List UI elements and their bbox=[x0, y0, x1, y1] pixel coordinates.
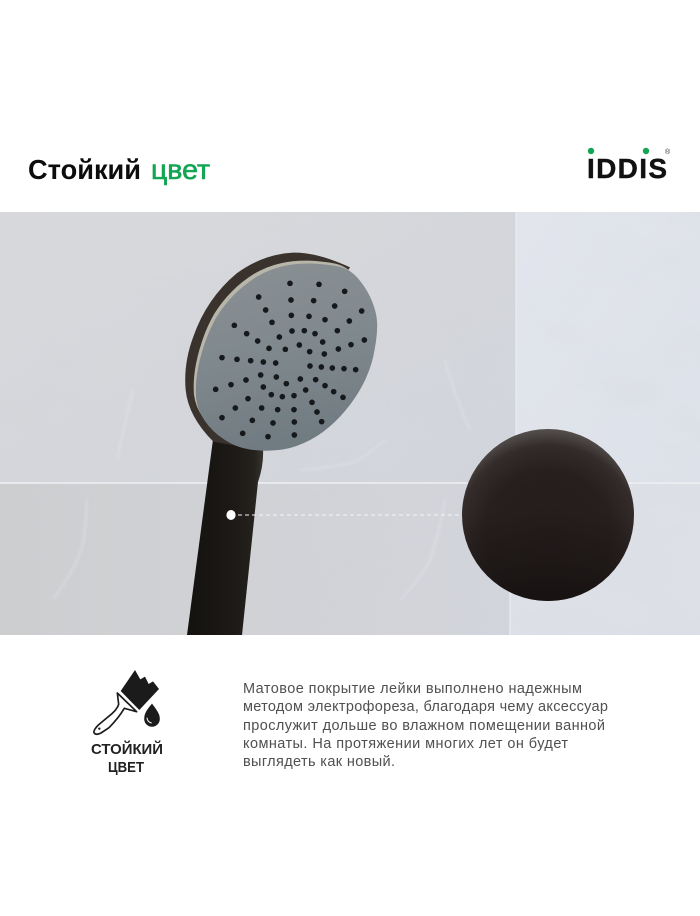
description text: методом электрофореза, благодаря чему аксессуар bbox=[243, 699, 608, 715]
logo: IDDIS: IDDIS bbox=[587, 153, 667, 184]
callout line from handle to finish swatch bbox=[226, 510, 462, 520]
shower handle bbox=[187, 432, 263, 635]
back shell bbox=[185, 253, 350, 448]
beige rim bbox=[194, 260, 352, 418]
title bbox=[28, 154, 210, 185]
finish swatch circle bbox=[462, 429, 634, 601]
icon: paint brush with drop bbox=[94, 670, 160, 734]
icon label bbox=[91, 740, 163, 776]
icon label: СТОЙКИЙ bbox=[91, 740, 163, 758]
logo: IDDIS: ® bbox=[665, 148, 671, 156]
icon label: ЦВЕТ bbox=[108, 759, 144, 776]
description text: выглядеть как новый. bbox=[243, 754, 395, 770]
description text: комнаты. На протяжении многих лет он будет bbox=[243, 736, 568, 752]
shower head bbox=[185, 253, 376, 450]
description text: прослужит дольше во влажном помещении ванной bbox=[243, 718, 605, 734]
spray nozzles bbox=[213, 280, 367, 439]
brush handle and ferrule bbox=[94, 693, 137, 734]
brush bristles bbox=[121, 670, 159, 710]
title: Стойкий bbox=[28, 154, 141, 185]
tile seams bbox=[510, 212, 516, 635]
paint drop bbox=[144, 704, 160, 727]
description text bbox=[243, 681, 608, 770]
title: цвет bbox=[151, 154, 210, 185]
description text: Матовое покрытие лейки выполнено надежным bbox=[243, 681, 582, 697]
spray face bbox=[197, 264, 376, 450]
photo panel: shower head on marble wall bbox=[0, 212, 700, 635]
marble wall background bbox=[0, 212, 700, 635]
